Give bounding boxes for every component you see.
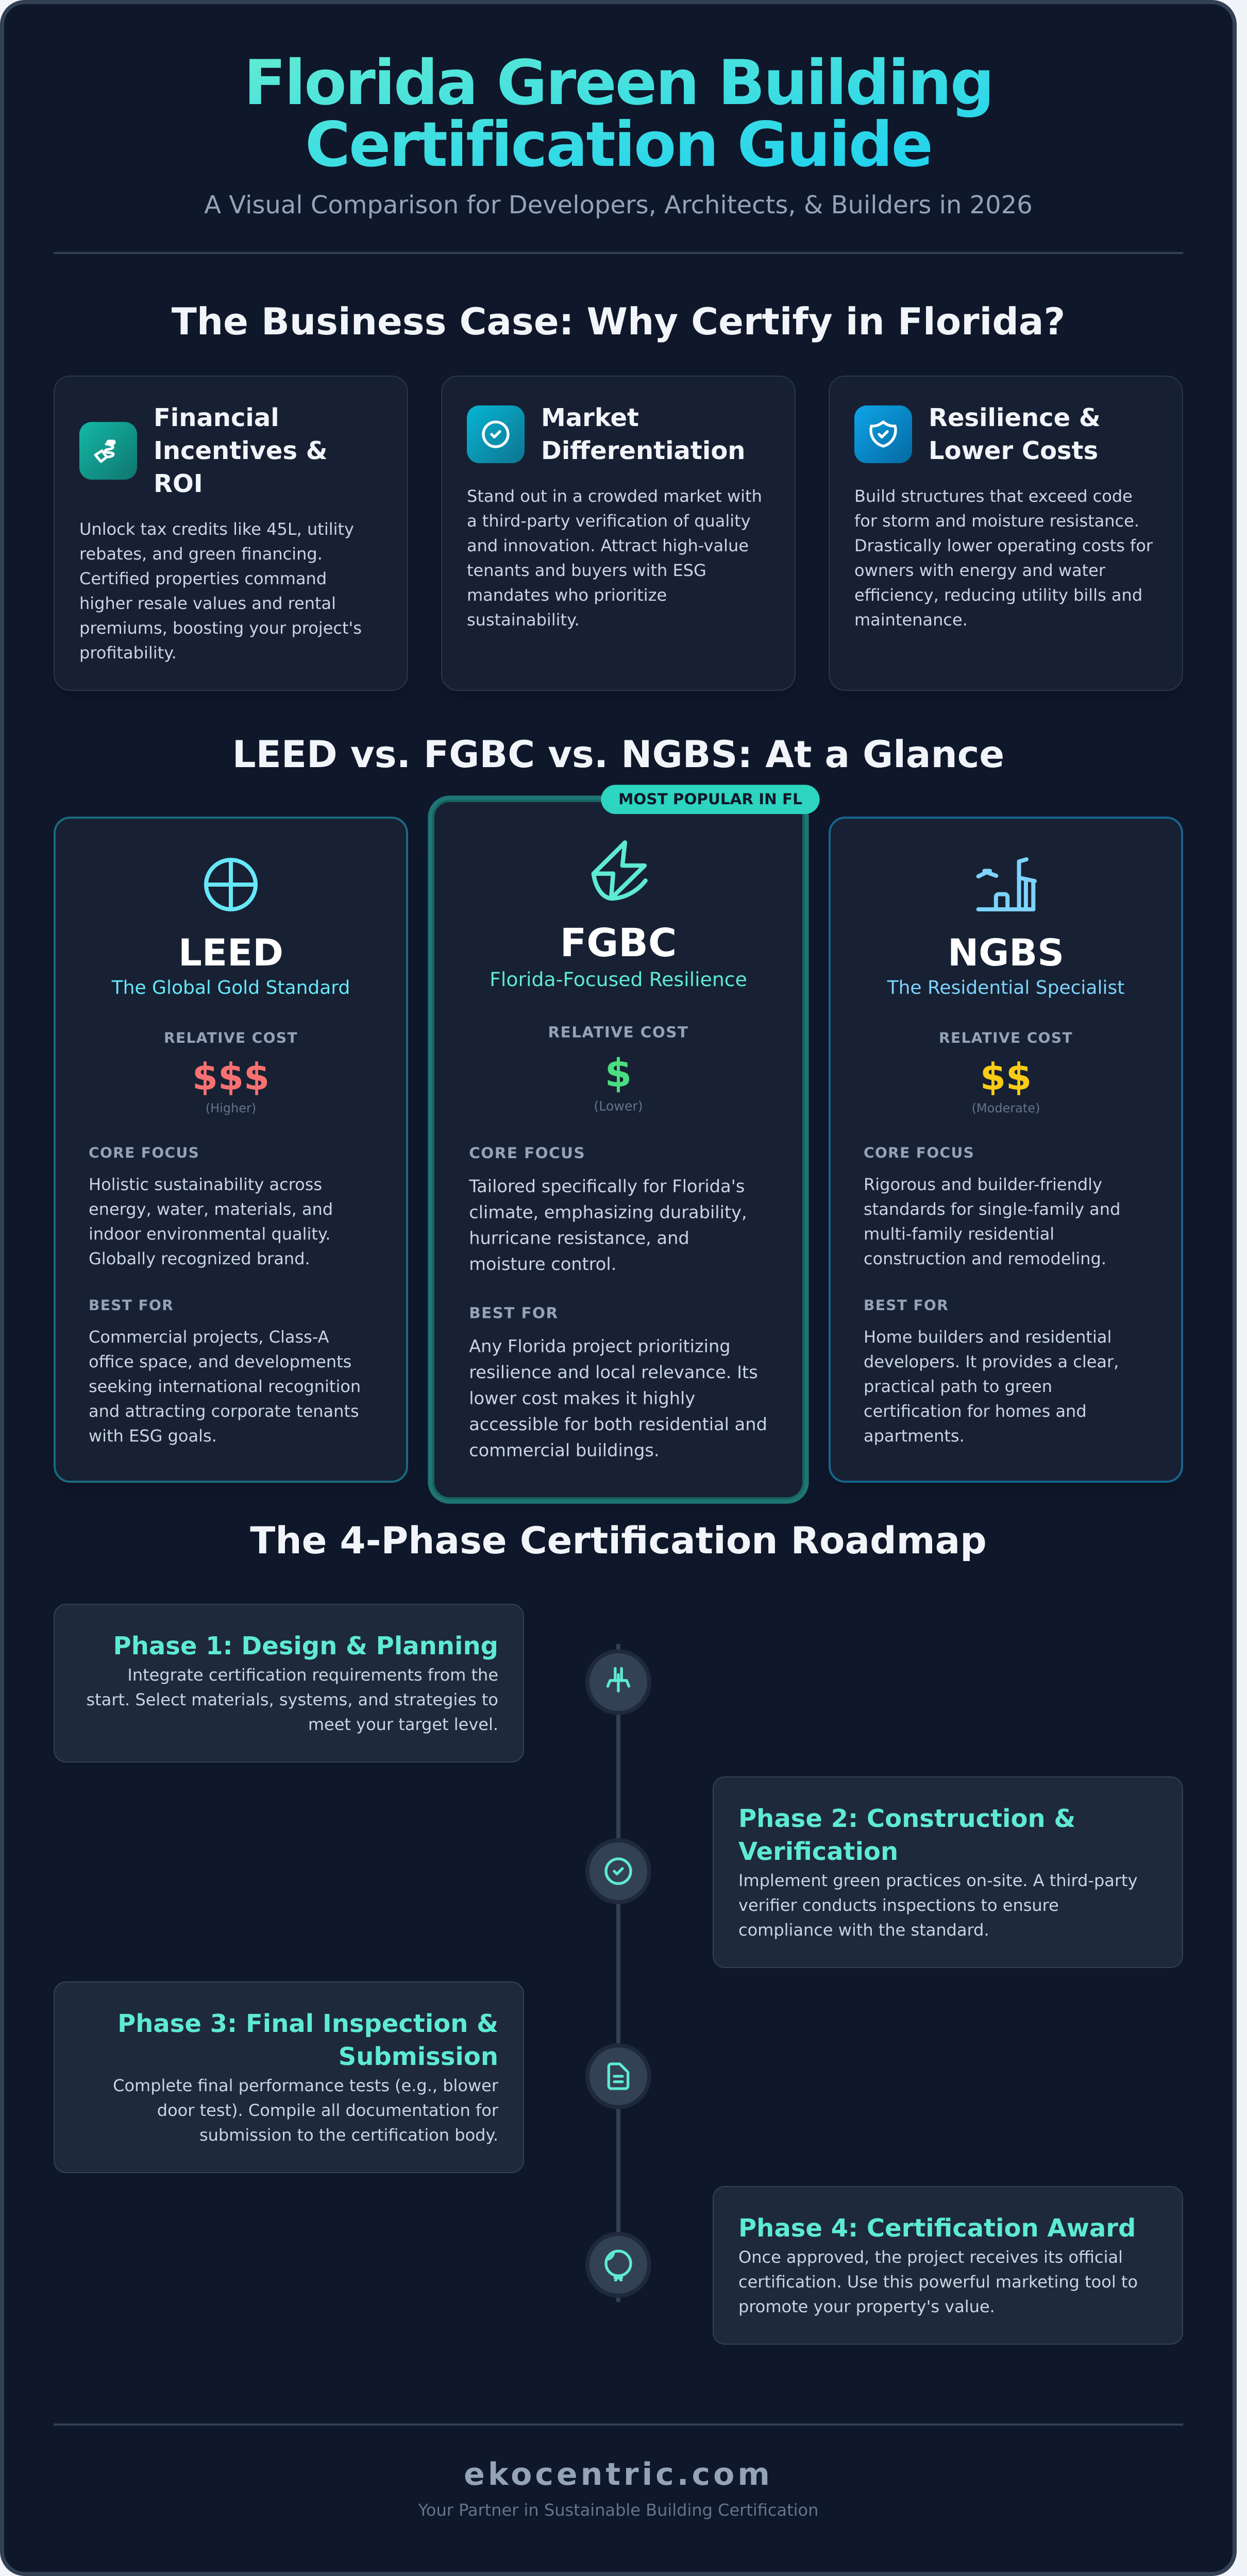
card text: and innovation. Attract high-value <box>467 536 749 555</box>
card text: efficiency, reducing utility bills and <box>854 585 1142 605</box>
best for text <box>469 1336 767 1461</box>
best for text: accessible for both residential and <box>469 1414 767 1434</box>
best for text <box>89 1327 361 1446</box>
cost value: $$ <box>980 1055 1032 1098</box>
phase text: Implement green practices on-site. A third-party <box>738 1871 1138 1890</box>
phase 2 card <box>713 1776 1183 1968</box>
icon: globe <box>204 858 258 911</box>
best for label: BEST FOR <box>864 1297 949 1314</box>
core focus text: climate, emphasizing durability, <box>469 1202 747 1223</box>
core focus text: Globally recognized brand. <box>89 1249 310 1268</box>
card title <box>929 403 1101 465</box>
card text: Certified properties command <box>79 569 327 588</box>
cost value: $$$ <box>192 1055 269 1098</box>
core focus text: moisture control. <box>469 1254 616 1274</box>
panel: market differentiation <box>441 376 796 691</box>
best for text: practical path to green <box>864 1377 1052 1396</box>
cost note: (Higher) <box>206 1101 256 1115</box>
core focus label: CORE FOCUS <box>864 1144 974 1161</box>
phase text: verifier conducts inspections to ensure <box>738 1895 1059 1915</box>
phase text: compliance with the standard. <box>738 1920 989 1940</box>
card text <box>854 486 1153 630</box>
card title: Market <box>541 403 639 432</box>
icon: shield <box>854 405 912 463</box>
standard name: NGBS <box>948 931 1064 974</box>
tagline: The Residential Specialist <box>887 977 1124 998</box>
best for label: BEST FOR <box>469 1304 559 1322</box>
best for text: Commercial projects, Class-A <box>89 1327 329 1347</box>
best for text <box>864 1327 1119 1446</box>
phase 1 card <box>54 1604 524 1762</box>
phase 4 card <box>713 2186 1183 2345</box>
best for text: with ESG goals. <box>89 1426 217 1446</box>
best for text: certification for homes and <box>864 1401 1087 1421</box>
card text: a third-party verification of quality <box>467 511 751 531</box>
card text: owners with energy and water <box>854 561 1105 580</box>
tagline: Florida-Focused Resilience <box>490 969 747 991</box>
badge: most popular: MOST POPULAR IN FL <box>618 790 802 808</box>
footer brand: ekocentric.com <box>464 2456 773 2493</box>
core focus text <box>864 1175 1120 1268</box>
subtitle: A Visual Comparison for Developers, Architects, & Builders in 2026 <box>204 191 1033 219</box>
phase text: Complete final performance tests (e.g., blower <box>113 2076 498 2095</box>
node 1 icon: planning <box>585 1649 651 1715</box>
best for text: and attracting corporate tenants <box>89 1401 359 1421</box>
core focus text: indoor environmental quality. <box>89 1224 331 1244</box>
phase text: promote your property's value. <box>738 2297 995 2316</box>
card text: sustainability. <box>467 610 580 630</box>
phase text <box>87 1665 498 1734</box>
card text: rebates, and green financing. <box>79 544 323 564</box>
best for text: developers. It provides a clear, <box>864 1352 1119 1371</box>
core focus text: standards for single-family and <box>864 1199 1120 1219</box>
footer tagline: Your Partner in Sustainable Building Certification <box>418 2500 818 2520</box>
card title: Differentiation <box>541 436 745 465</box>
best for text: lower cost makes it highly <box>469 1388 695 1409</box>
best for text: office space, and developments <box>89 1352 351 1371</box>
title <box>242 53 995 176</box>
card text: Drastically lower operating costs for <box>854 536 1153 555</box>
phase title <box>117 2009 498 2071</box>
panel: LEED <box>54 817 408 1483</box>
node 3 icon: document <box>585 2043 651 2109</box>
core focus text: construction and remodeling. <box>864 1249 1106 1268</box>
best for text: Home builders and residential <box>864 1327 1111 1347</box>
core focus text: multi-family residential <box>864 1224 1054 1244</box>
phase title: Phase 3: Final Inspection & <box>117 2009 498 2038</box>
heading: roadmap: The 4-Phase Certification Roadmap <box>250 1519 987 1562</box>
best for label: BEST FOR <box>89 1297 174 1314</box>
phase text: submission to the certification body. <box>199 2125 498 2145</box>
phase text: Once approved, the project receives its official <box>738 2247 1123 2267</box>
core focus label: CORE FOCUS <box>469 1144 585 1162</box>
panel: resilience <box>829 376 1183 691</box>
card title <box>154 403 328 498</box>
core focus text <box>469 1176 747 1274</box>
standard name: FGBC <box>560 920 677 965</box>
phase title: Phase 1: Design & Planning <box>113 1632 498 1660</box>
title: Certification Guide <box>305 109 932 181</box>
heading: comparison: LEED vs. FGBC vs. NGBS: At a Glance <box>232 733 1004 776</box>
core focus label: CORE FOCUS <box>89 1144 199 1161</box>
card text: Stand out in a crowded market with <box>467 486 762 506</box>
best for text: commercial buildings. <box>469 1440 660 1461</box>
card text: for storm and moisture resistance. <box>854 511 1139 531</box>
core focus text: Rigorous and builder-friendly <box>864 1175 1102 1194</box>
core focus text: Tailored specifically for Florida's <box>469 1176 745 1196</box>
phase 3 card <box>54 1981 524 2173</box>
card title: ROI <box>154 469 203 498</box>
card text: profitability. <box>79 643 177 663</box>
phase title <box>738 1804 1075 1866</box>
core focus text <box>89 1175 333 1268</box>
phase text <box>113 2076 499 2145</box>
phase text <box>738 2247 1138 2316</box>
phase text <box>738 1871 1138 1940</box>
title: Florida Green Building <box>244 47 993 119</box>
cost label: RELATIVE COST <box>548 1023 688 1041</box>
cost note: (Moderate) <box>972 1101 1040 1115</box>
best for text: seeking international recognition <box>89 1377 361 1396</box>
header <box>204 47 1033 219</box>
phase title: Submission <box>339 2042 498 2071</box>
cost label: RELATIVE COST <box>164 1029 298 1046</box>
phase title: Verification <box>738 1837 898 1866</box>
timeline line <box>616 1643 620 2302</box>
card text: premiums, boosting your project's <box>79 618 362 638</box>
card text: tenants and buyers with ESG <box>467 561 706 580</box>
card text <box>467 486 762 630</box>
card text: maintenance. <box>854 610 968 630</box>
card text: higher resale values and rental <box>79 594 336 613</box>
phase text: Integrate certification requirements from the <box>127 1665 498 1685</box>
card text: Build structures that exceed code <box>854 486 1133 506</box>
tagline: The Global Gold Standard <box>112 977 350 998</box>
core focus text: Holistic sustainability across <box>89 1175 322 1194</box>
best for text: Any Florida project prioritizing <box>469 1336 731 1357</box>
phase text: start. Select materials, systems, and strategies to <box>87 1690 498 1709</box>
card title: Resilience & <box>929 403 1101 432</box>
icon: check circle <box>467 405 525 463</box>
icon: bolt and leaf <box>592 840 648 901</box>
heading: business case: The Business Case: Why Certify in Florida? <box>172 300 1065 343</box>
phase text: meet your target level. <box>308 1715 498 1734</box>
best for text: apartments. <box>864 1426 965 1446</box>
card text: mandates who prioritize <box>467 585 667 605</box>
standard name: LEED <box>178 931 283 974</box>
phase title: Phase 2: Construction & <box>738 1804 1075 1833</box>
card title: Lower Costs <box>929 436 1098 465</box>
panel: NGBS <box>829 817 1183 1483</box>
phase title: Phase 4: Certification Award <box>738 2214 1136 2243</box>
cost note: (Lower) <box>594 1098 643 1114</box>
card title: Financial <box>154 403 279 432</box>
phase text: certification. Use this powerful marketing tool to <box>738 2272 1138 2292</box>
core focus text: energy, water, materials, and <box>89 1199 333 1219</box>
icon: buildings <box>976 857 1037 911</box>
node 4 icon: award <box>585 2232 651 2298</box>
phase text: door test). Compile all documentation for <box>157 2100 498 2120</box>
cost label: RELATIVE COST <box>939 1029 1073 1046</box>
best for text: resilience and local relevance. Its <box>469 1362 758 1382</box>
node 2 icon: check <box>585 1838 651 1904</box>
card title: Incentives & <box>154 436 328 465</box>
card text: Unlock tax credits like 45L, utility <box>79 519 354 539</box>
core focus text: hurricane resistance, and <box>469 1228 689 1248</box>
badge: most popular <box>601 785 820 814</box>
panel: financial incentives <box>54 376 408 691</box>
panel: FGBC (featured) <box>432 800 804 1499</box>
card text <box>79 519 362 663</box>
cost value: $ <box>605 1050 632 1096</box>
card title <box>541 403 745 465</box>
icon: money <box>79 422 137 480</box>
